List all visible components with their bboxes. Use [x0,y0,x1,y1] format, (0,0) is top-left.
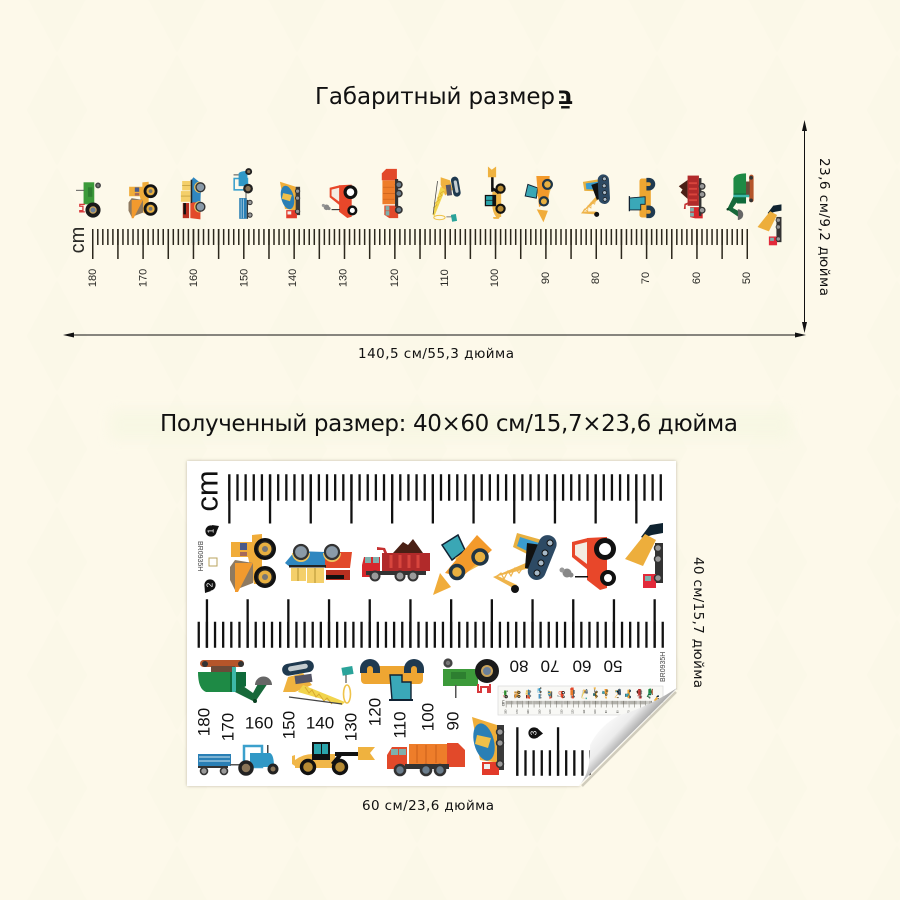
product code right: BR0935H [660,652,667,682]
sheet numbers [194,656,622,741]
vehicle: overturned blue dump truck with crates [285,545,352,583]
sheet numbers: 100 [418,703,438,731]
vehicle: wheel loader [433,535,492,595]
vehicle: red car with smoke [560,537,614,590]
ruler numbers: 130 [338,269,350,287]
vehicle: yellow dozer [230,534,274,592]
sheet numbers: 90 [444,712,462,730]
vehicle: front loader with claw [292,742,375,774]
label: overall width: 140,5 см/55,3 дюйма [358,346,514,362]
sheet numbers: 70 [541,656,559,676]
peeled corner [578,688,680,786]
sheet shadow and paper [187,461,676,786]
ruler numbers: 60 [691,272,703,284]
sheet numbers: 60 [573,656,591,676]
label: sheet height: 40 см/15,7 дюйма [690,557,706,688]
vehicle: green harvester [198,660,272,703]
sheet numbers: 170 [218,713,238,741]
strip: full decal preview [67,167,781,287]
sheet numbers: 80 [510,656,528,676]
sheet numbers: 120 [366,698,384,726]
marker pins: 1 [206,528,216,533]
ruler numbers: 70 [640,272,652,284]
vehicle: crawler crane with wrecking ball [493,532,559,593]
arrow: overall height [802,120,807,333]
heading: finished size: Полученный размер: 40×60 см/15,7×23,6 дюйма [160,411,738,437]
ruler numbers: 50 [741,272,753,284]
sheet ruler top [228,488,662,499]
ruler numbers: 140 [287,269,299,287]
mini preview of full decal [498,686,663,715]
marker pins: 2 [206,582,214,587]
stray glyph after title: בַּ [558,81,573,110]
sheet numbers: 110 [390,711,410,739]
marker pins: 3 [530,730,538,735]
ruler numbers [87,269,753,287]
vehicle: tipper with black load, clipped [625,523,663,588]
sheet ruler middle [198,624,664,635]
sheet numbers: 130 [342,713,360,741]
ruler numbers: 170 [138,269,150,287]
heading glow [110,410,790,440]
ruler numbers: 150 [238,269,250,287]
sheet numbers: 150 [280,711,298,739]
vehicle: red dirt truck [362,539,430,580]
vehicle: blue tractor with trailer [198,745,277,774]
title: Габаритный размер [315,84,555,110]
sheet numbers: 180 [194,708,214,736]
ruler numbers: 110 [439,269,451,287]
ruler ticks [92,237,748,244]
ruler numbers: 160 [188,269,200,287]
ruler numbers: 180 [87,269,99,287]
vehicle: yellow crane [281,659,354,705]
label: sheet width: 60 см/23,6 дюйма [362,798,494,814]
marker pins [204,525,543,739]
label: overall height: 23,6 см/9,2 дюйма [816,158,832,296]
sheet unit label: cm [190,470,224,512]
sheet contents [190,470,667,775]
strip vehicles [76,167,781,245]
sheet numbers: 50 [604,656,622,676]
ruler numbers: 90 [540,272,552,284]
vehicle: green tractor [443,660,496,698]
sheet ruler bottom right [516,752,591,763]
ruler numbers: 100 [489,269,501,287]
arrow: overall width [63,332,806,338]
vehicle: cement mixer [470,717,504,775]
sheet numbers: 160 [245,714,273,732]
ruler unit label: cm [67,227,89,253]
vehicle: orange garbage truck [387,743,465,775]
ruler numbers: 120 [389,269,401,287]
logo [209,558,217,566]
product code left: BR0935H [196,541,203,571]
sheet numbers: 140 [306,714,334,732]
vehicle: road machine with cab below [360,659,424,701]
ruler numbers: 80 [590,272,602,284]
